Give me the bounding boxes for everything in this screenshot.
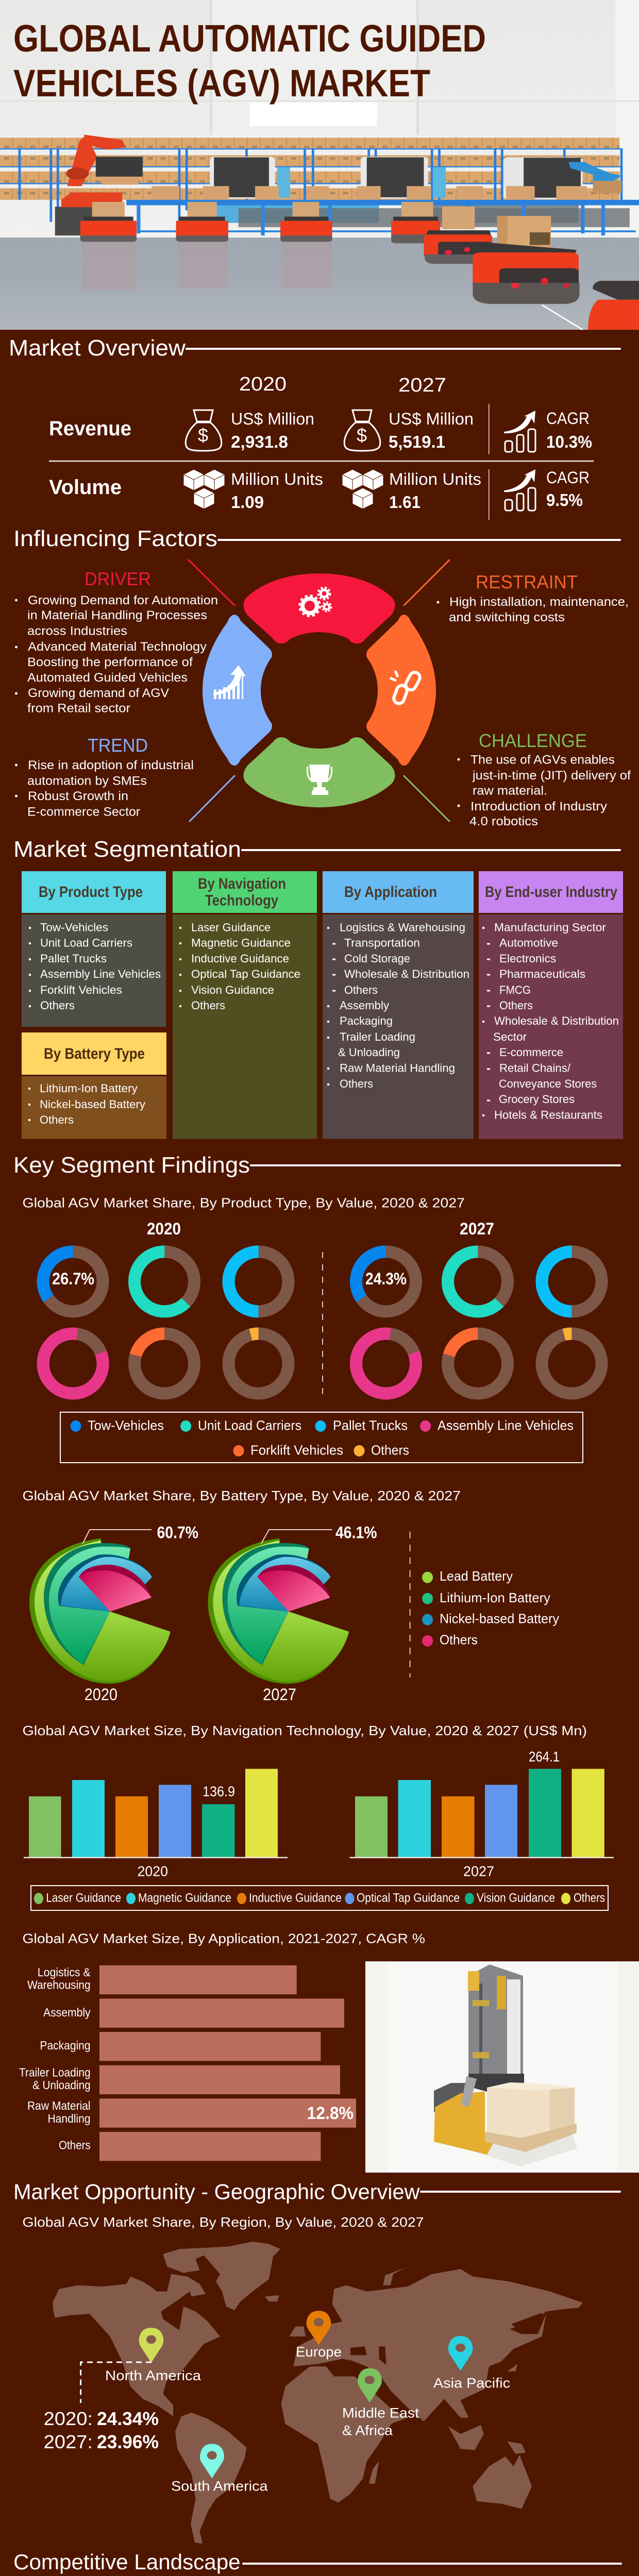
year 2020: 2020 — [137, 1863, 168, 1879]
text block: challenge — [458, 730, 631, 828]
arrow: challenge line — [404, 776, 449, 821]
legend — [60, 1412, 583, 1463]
panel: by end-user industry: Conveyance Stores — [499, 1077, 597, 1090]
map pin: asia pacific — [448, 2336, 473, 2370]
callout 46.1%: 46.1% — [335, 1523, 377, 1542]
callout 60.7%: 60.7% — [157, 1523, 198, 1542]
panel: by navigation technology — [173, 871, 317, 1139]
panel: by end-user industry: FMCG — [499, 984, 531, 996]
legend: Vision Guidance — [477, 1891, 555, 1905]
revenue CAGR: CAGR — [546, 409, 590, 428]
land masses — [53, 2242, 583, 2544]
legend: Unit Load Carriers — [198, 1418, 301, 1433]
text block: trend: TREND — [88, 735, 148, 756]
year 2027: 2027 — [460, 1219, 494, 1238]
text block: trend: Rise in adoption of industrial — [28, 758, 194, 772]
value 24.3%: 24.3% — [365, 1269, 407, 1288]
panel: by product type: Forklift Vehicles — [40, 984, 122, 996]
volume 2027 — [389, 470, 481, 512]
category labels: Assembly — [43, 2006, 91, 2019]
text block: challenge: 4.0 robotics — [469, 815, 538, 828]
panel: by application: Raw Material Handling — [340, 1061, 455, 1075]
icon: cubes 2020 — [183, 469, 225, 509]
chart heading: Global AGV Market Size, By Navigation Technology, By Value, 2020 & 2027 (US$ Mn) — [23, 1723, 587, 1738]
bars 2027 — [355, 1769, 604, 1857]
legend: Magnetic Guidance — [138, 1891, 231, 1905]
category labels: Packaging — [40, 2039, 91, 2052]
category labels: Raw Material — [27, 2099, 91, 2112]
text block: driver: Boosting the performance of — [27, 655, 193, 669]
value 264.1: 264.1 — [529, 1749, 560, 1765]
panel: by application: Packaging — [340, 1014, 393, 1027]
revenue label: Revenue — [49, 417, 131, 440]
text block: driver: Advanced Material Technology — [28, 640, 207, 654]
text block: driver: Growing Demand for Automation — [28, 594, 218, 607]
text block: driver: in Material Handling Processes — [27, 608, 207, 622]
panel: by end-user industry: Grocery Stores — [499, 1093, 575, 1106]
revenue CAGR: 10.3% — [546, 432, 592, 451]
text block: driver — [15, 568, 218, 715]
text block: challenge: CHALLENGE — [479, 730, 587, 751]
text block: trend: Robust Growth in — [28, 789, 128, 803]
legend: Others — [371, 1443, 409, 1458]
legend — [422, 1568, 559, 1648]
map pin: north america — [139, 2328, 163, 2363]
panel: by product type: Unit Load Carriers — [40, 937, 132, 949]
panel: by application: Others — [344, 984, 378, 996]
panel: by navigation technology: Others — [191, 999, 225, 1012]
panel: by product type: Tow-Vehicles — [40, 921, 108, 934]
pie 2027 — [208, 1538, 349, 1684]
title: GLOBAL AUTOMATIC GUIDED — [13, 17, 486, 60]
legend: Others — [574, 1891, 605, 1905]
chart heading: Global AGV Market Size, By Application, 2021-2027, CAGR % — [23, 1931, 425, 1946]
panel: by battery type: By Battery Type — [44, 1045, 145, 1062]
inland seas — [350, 2313, 542, 2365]
heading: market opportunity: Market Opportunity - Geographic Overview — [13, 2179, 420, 2204]
category labels: & Unloading — [32, 2078, 91, 2092]
robot arm — [61, 134, 143, 207]
panel: by end-user industry: Manufacturing Sector — [494, 921, 606, 934]
text block: driver: Growing demand of AGV — [28, 686, 169, 700]
heading: competitive landscape: Competitive Landscape — [13, 2550, 241, 2574]
volume CAGR: CAGR — [546, 468, 590, 487]
text block: challenge: just-in-time (JIT) delivery of — [472, 769, 631, 783]
heading: influencing factors: Influencing Factors — [13, 526, 217, 551]
volume 2027: Million Units — [389, 470, 481, 488]
donuts 2020 — [31, 1239, 295, 1402]
volume 2020: 1.09 — [231, 493, 264, 512]
text block: restraint — [437, 571, 629, 624]
label: north america: North America — [105, 2368, 201, 2383]
icon: trophy — [307, 765, 332, 795]
icon: money bag 2020: $ — [198, 425, 208, 446]
panel: by end-user industry: Retail Chains/ — [499, 1061, 571, 1075]
chart: battery type pies — [23, 1488, 559, 1704]
category labels: Trailer Loading — [19, 2066, 91, 2079]
panel: by navigation technology: Vision Guidance — [191, 984, 274, 996]
panel: by navigation technology: By Navigation — [198, 875, 286, 892]
chart: application CAGR bars — [19, 1931, 425, 2161]
label: south america: South America — [171, 2479, 268, 2494]
category labels: Warehousing — [27, 1978, 91, 1992]
chart heading: Global AGV Market Share, By Region, By Value, 2020 & 2027 — [23, 2214, 424, 2230]
map pin: europe — [307, 2311, 331, 2345]
donuts 2027 — [344, 1239, 609, 1402]
year 2027: 2027 — [263, 1685, 296, 1704]
text block: trend: automation by SMEs — [27, 774, 147, 788]
callout 60.7% — [82, 1523, 198, 1544]
panel: by application: Others — [340, 1077, 373, 1090]
heading: market overview: Market Overview — [9, 335, 186, 361]
volume 2020: Million Units — [231, 470, 323, 488]
arrow: restraint line — [404, 560, 449, 605]
label: middle east and africa: & Africa — [342, 2423, 393, 2438]
value 26.7%: 26.7% — [52, 1269, 94, 1288]
panel: by application — [323, 871, 474, 1139]
image: forklift AGV — [365, 1961, 639, 2173]
small AGVs — [92, 202, 433, 219]
legend: Pallet Trucks — [333, 1418, 408, 1433]
revenue 2027: US$ Million — [389, 410, 474, 428]
year 2027: 2027 — [398, 375, 446, 396]
panel: by application: Cold Storage — [344, 952, 410, 965]
volume CAGR: 9.5% — [546, 490, 583, 510]
panel: by end-user industry: Automotive — [499, 937, 558, 949]
panel: by end-user industry: Sector — [493, 1030, 527, 1043]
title — [13, 17, 486, 105]
category labels: Handling — [47, 2112, 91, 2125]
panel: by navigation technology: Laser Guidance — [191, 921, 271, 934]
title: VEHICLES (AGV) MARKET — [13, 62, 430, 105]
text block: restraint: High installation, maintenance, — [449, 595, 629, 609]
value 136.9: 136.9 — [203, 1784, 235, 1800]
value 12.8%: 12.8% — [307, 2104, 354, 2123]
panel: by end-user industry: Hotels & Restaurants — [494, 1109, 602, 1121]
panel: by product type — [22, 871, 166, 1027]
pie 2020 — [29, 1538, 171, 1684]
panel: by product type: Pallet Trucks — [40, 952, 107, 965]
map pin: south america — [200, 2444, 224, 2478]
callout: north america share: 2027: — [44, 2431, 93, 2452]
volume label: Volume — [49, 476, 122, 499]
panel: by navigation technology: Magnetic Guidance — [191, 937, 291, 949]
legend: Nickel-based Battery — [440, 1611, 559, 1626]
volume CAGR — [546, 468, 590, 510]
wheel: trend segment — [203, 615, 272, 766]
panel: by product type: Others — [40, 999, 75, 1012]
panel: by end-user industry: Wholesale & Distribution — [494, 1014, 619, 1027]
label: asia pacific: Asia Pacific — [433, 2375, 510, 2391]
revenue 2027: 5,519.1 — [389, 432, 445, 451]
year 2020: 2020 — [239, 374, 287, 395]
panel: by end-user industry: Pharmaceuticals — [499, 968, 585, 980]
heading: market opportunity — [13, 2179, 621, 2204]
category labels — [19, 1965, 91, 2152]
legend: Lead Battery — [440, 1568, 513, 1584]
hero: AGV warehouse scene — [0, 0, 639, 330]
text block: driver: across Industries — [27, 624, 127, 638]
text block: restraint: RESTRAINT — [476, 571, 578, 592]
wheel: driver segment — [243, 573, 395, 643]
panel: by end-user industry: By End-user Industry — [485, 884, 617, 901]
text block: restraint: and switching costs — [449, 611, 565, 624]
panel: by application: Transportation — [344, 937, 420, 949]
year 2020: 2020 — [147, 1219, 181, 1238]
legend: Forklift Vehicles — [250, 1443, 343, 1458]
category labels: Others — [59, 2139, 91, 2152]
heading: market segmentation — [13, 837, 621, 862]
text block: driver: from Retail sector — [27, 702, 130, 715]
icon: money bag 2027: $ — [357, 425, 367, 446]
panel: influencing factors — [15, 560, 631, 828]
text block: driver: Automated Guided Vehicles — [27, 671, 188, 685]
legend: Laser Guidance — [46, 1891, 121, 1905]
icon: money bag 2020 — [186, 410, 222, 451]
year 2027: 2027 — [463, 1863, 494, 1879]
chart: product type donuts — [23, 1195, 609, 1463]
panel: market overview figures — [49, 374, 594, 520]
text block: challenge: The use of AGVs enables — [470, 753, 615, 767]
panel: by navigation technology: Technology — [205, 892, 278, 909]
panel: by application: & Unloading — [338, 1046, 400, 1059]
panel: by application: Trailer Loading — [340, 1030, 415, 1043]
text block: challenge: raw material. — [473, 784, 547, 798]
panel: by navigation technology: Inductive Guidance — [191, 952, 289, 965]
volume 2020 — [231, 470, 323, 512]
panel: by battery type: Others — [40, 1113, 74, 1126]
panel: by battery type: Nickel-based Battery — [40, 1098, 145, 1111]
panel: by battery type: Lithium-Ion Battery — [40, 1082, 138, 1095]
revenue 2027 — [389, 410, 474, 451]
label: europe: Europe — [296, 2344, 342, 2360]
mid AGV — [424, 207, 492, 264]
text block: challenge: Introduction of Industry — [470, 800, 607, 814]
label: middle east and africa — [342, 2405, 419, 2438]
panel: by product type: By Product Type — [39, 884, 143, 901]
callout: north america share — [44, 2362, 159, 2452]
heading: market segmentation: Market Segmentation — [13, 837, 241, 862]
map: world regions — [53, 2242, 583, 2544]
revenue 2020: US$ Million — [231, 410, 314, 428]
icon: money bag 2027 — [344, 410, 380, 451]
panel: by end-user industry: Others — [499, 999, 533, 1012]
bars — [99, 1965, 356, 2161]
heading: competitive landscape — [13, 2550, 622, 2574]
label: middle east and africa: Middle East — [342, 2405, 419, 2421]
text block: driver: DRIVER — [85, 568, 151, 589]
callout: north america share: 2020: — [44, 2408, 93, 2429]
heading: key segment findings: Key Segment Findings — [13, 1153, 250, 1178]
callout: north america share: 23.96% — [97, 2431, 159, 2452]
callout: north america share: 24.34% — [97, 2408, 159, 2429]
wheel: restraint segment — [366, 615, 436, 766]
text block: trend — [15, 735, 194, 819]
legend — [31, 1886, 608, 1910]
panel: by end-user industry: E-commerce — [499, 1046, 563, 1059]
panel: by application: By Application — [344, 884, 437, 901]
panel: by end-user industry — [479, 871, 623, 1139]
icon: gears — [300, 588, 331, 616]
panel: by application: Wholesale & Distribution — [344, 968, 469, 980]
legend: Tow-Vehicles — [88, 1418, 164, 1433]
legend: Others — [440, 1632, 478, 1648]
category labels: Logistics & — [38, 1965, 91, 1979]
panel: by navigation technology: Optical Tap Guidance — [191, 968, 300, 980]
arrow: driver line — [189, 560, 234, 605]
legend: Assembly Line Vehicles — [438, 1418, 574, 1433]
arrow: trend line — [190, 776, 234, 821]
year 2020: 2020 — [85, 1685, 117, 1704]
panel: by application: Assembly — [340, 999, 389, 1012]
revenue 2020 — [231, 410, 314, 451]
icon: broken chain — [390, 670, 422, 705]
chart: navigation technology bars — [23, 1723, 614, 1910]
icon: growth arrow — [213, 665, 246, 699]
heading: influencing factors — [13, 526, 621, 551]
bars 2020 — [29, 1769, 278, 1857]
icon: growth chart volume — [504, 469, 535, 511]
panel: by product type: Assembly Line Vehicles — [40, 968, 161, 980]
revenue CAGR — [546, 409, 592, 451]
heading: market overview — [9, 335, 621, 361]
chart heading: Global AGV Market Share, By Product Type, By Value, 2020 & 2027 — [23, 1195, 465, 1211]
heading: key segment findings — [13, 1153, 621, 1178]
legend: Optical Tap Guidance — [357, 1891, 460, 1905]
icon: cubes 2027 — [342, 469, 383, 509]
map pin: middle east and africa — [358, 2368, 382, 2403]
wheel: challenge segment — [243, 737, 395, 807]
panel: by battery type — [22, 1032, 166, 1139]
icon: growth chart revenue — [504, 411, 535, 452]
panel: by end-user industry: Electronics — [499, 952, 556, 965]
callout 46.1% — [261, 1523, 377, 1544]
text block: trend: E-commerce Sector — [27, 805, 140, 819]
panel: by application: Logistics & Warehousing — [340, 921, 465, 934]
legend: Inductive Guidance — [249, 1891, 342, 1905]
large AGV — [473, 216, 580, 304]
revenue 2020: 2,931.8 — [231, 432, 288, 451]
volume 2027: 1.61 — [389, 493, 421, 512]
chart heading: Global AGV Market Share, By Battery Type, By Value, 2020 & 2027 — [23, 1488, 461, 1503]
corner AGV — [588, 281, 639, 330]
legend: Lithium-Ion Battery — [440, 1590, 550, 1605]
